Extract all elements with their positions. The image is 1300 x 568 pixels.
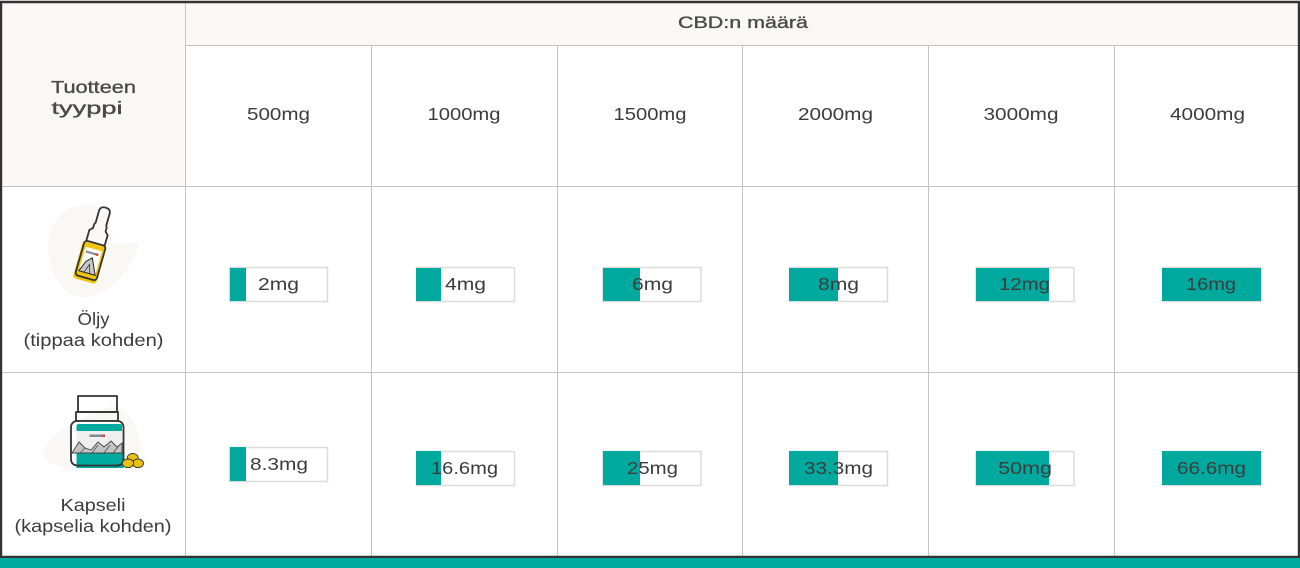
column headings: 3000mg (984, 104, 1058, 124)
bar: capsule 3000mg (976, 451, 1074, 486)
bar: capsule 3000mg: 50mg (998, 458, 1052, 478)
bar: capsule 2000mg: 33.3mg (804, 458, 873, 478)
column headings: 2000mg (798, 104, 873, 124)
bar: capsule 4000mg: 66.6mg (1177, 458, 1246, 478)
label: capsule (14, 495, 172, 536)
label: capsule: Kapseli (60, 495, 126, 515)
column headings: 1000mg (428, 104, 500, 124)
heading: product type (51, 77, 136, 118)
bar: oil 500mg (230, 268, 328, 302)
label: capsule: (kapselia kohden) (14, 516, 172, 536)
column headings (247, 104, 1245, 124)
bar: oil 1000mg (416, 268, 514, 302)
bar: capsule 500mg: 8.3mg (250, 454, 308, 474)
icon: capsule jar (43, 396, 144, 470)
heading: product type: tyyppi (52, 98, 122, 118)
bar: capsule 1500mg: 25mg (627, 458, 678, 478)
header background: product type (2, 3, 185, 186)
bottom teal band (0, 558, 1300, 568)
column headings: 1500mg (614, 104, 686, 124)
bar: capsule 1000mg (416, 451, 514, 486)
bar: oil 4000mg: 16mg (1186, 274, 1236, 294)
column headings: 500mg (247, 104, 310, 124)
bar: oil 4000mg (1162, 268, 1261, 302)
bar: capsule 1000mg: 16.6mg (431, 458, 498, 478)
label: oil: Öljy (78, 309, 110, 329)
bar: capsule 1500mg (603, 451, 701, 486)
bar: oil 3000mg: 12mg (999, 274, 1050, 294)
label: oil: (tippaa kohden) (24, 330, 164, 350)
icon: oil dropper bottle (48, 204, 139, 297)
bar: capsule 500mg (230, 447, 328, 482)
bar: capsule 2000mg (789, 451, 888, 486)
bar: oil 1000mg: 4mg (445, 274, 486, 294)
bar: oil 2000mg (789, 268, 888, 302)
header background: CBD amount (185, 3, 1298, 45)
heading: product type: Tuotteen (51, 77, 136, 97)
heading: CBD amount: CBD:n määrä (678, 13, 809, 32)
bar: capsule 4000mg (1162, 451, 1261, 486)
bar: oil 3000mg (976, 268, 1074, 302)
bar: oil 2000mg: 8mg (818, 274, 859, 294)
bar: oil 1500mg: 6mg (632, 274, 673, 294)
label: oil (24, 309, 164, 350)
bar: oil 500mg: 2mg (258, 274, 299, 294)
column headings: 4000mg (1170, 104, 1245, 124)
bar: oil 1500mg (603, 268, 701, 302)
